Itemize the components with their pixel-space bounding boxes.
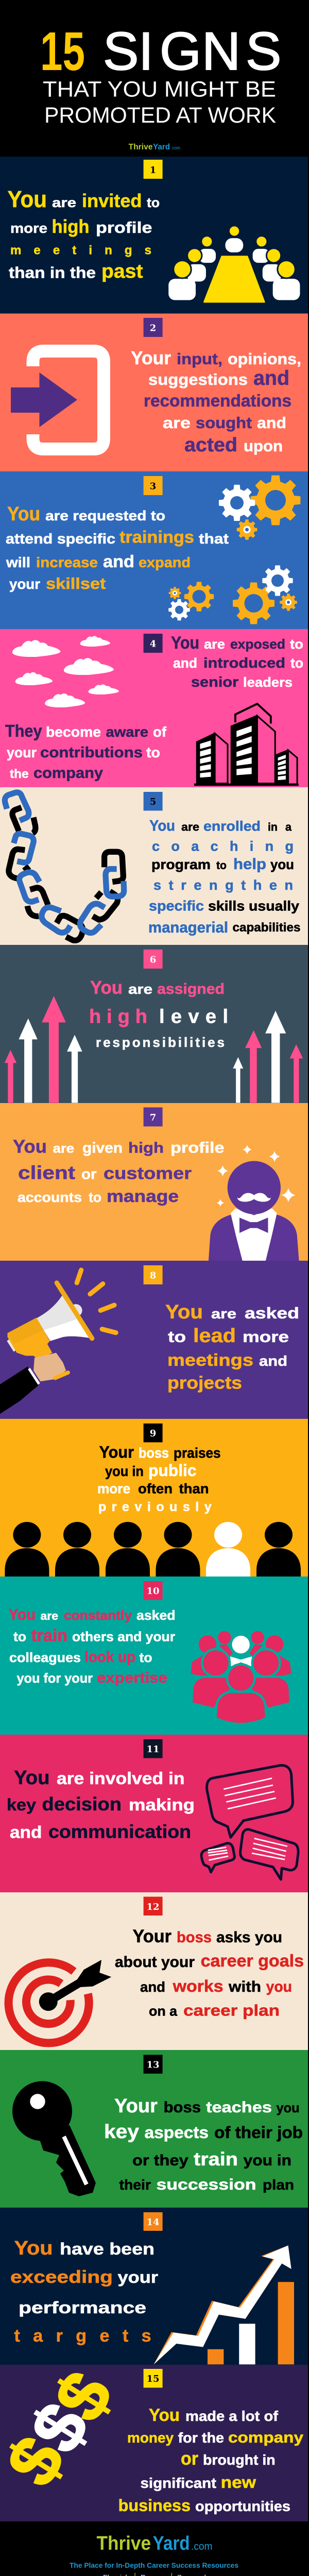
- text: sign 10: constantly: [64, 1607, 132, 1623]
- text: sign 2: sought: [196, 414, 252, 432]
- text: sign 9: often: [138, 1481, 173, 1497]
- logo: ThriveYard: .com: [171, 145, 180, 150]
- icon: man with moustache and bow tie: [209, 1145, 299, 1261]
- text: sign 13: train: [194, 2148, 238, 2170]
- text: sign 6: responsibilities: [96, 1035, 225, 1050]
- text: sign 3: skillset: [46, 574, 106, 592]
- text: sign 8: and: [259, 1353, 287, 1369]
- text: sign 3: are requested to: [45, 508, 165, 523]
- text: sign 5: to: [216, 859, 227, 872]
- badge 11: 11: [146, 1744, 160, 1755]
- panel: sign 8 lead meetings: [0, 1261, 309, 1419]
- text: sign 5: program: [151, 857, 211, 872]
- panel: sign 9 praise: [0, 1419, 309, 1577]
- text: sign 3: and: [103, 552, 134, 571]
- text: sign 14: your: [117, 2268, 158, 2286]
- badge 13: [144, 2055, 163, 2074]
- text: sign 13: plan: [263, 2177, 294, 2193]
- text: sign 15: new: [221, 2473, 256, 2492]
- icon: enter arrow: [11, 351, 104, 449]
- text: sign 4 upper: to: [290, 655, 303, 671]
- text: sign 1: [7, 186, 160, 282]
- text: sign 12: you: [266, 1978, 292, 1995]
- badge 5: [144, 792, 163, 811]
- text: sign 4 upper: introduced: [203, 655, 285, 671]
- badge 11: [144, 1739, 163, 1758]
- text: sign 3: increase: [36, 554, 98, 570]
- text: sign 13: boss: [164, 2099, 201, 2116]
- title: 15 Signs: SIGNS: [103, 22, 281, 81]
- text: sign 5: help: [233, 856, 266, 873]
- logo: ThriveYard footer: .com: [191, 2541, 212, 2552]
- text: sign 9: praises: [174, 1445, 221, 1461]
- text: sign 13: teaches: [206, 2099, 272, 2116]
- text: sign 4 upper: You: [171, 633, 199, 653]
- badge 1: 1: [150, 165, 156, 176]
- text: sign 4 lower: aware: [106, 724, 148, 740]
- text: sign 12: boss: [177, 1929, 212, 1946]
- text: sign 14: exceeding: [10, 2267, 113, 2287]
- text: sign 15: business: [118, 2496, 191, 2515]
- text: sign 4 upper: senior: [191, 674, 238, 690]
- badge 14: [144, 2212, 163, 2231]
- text: sign 10: train: [31, 1626, 67, 1645]
- logo: ThriveYard footer: Yard: [153, 2533, 190, 2554]
- text: sign 12: [115, 1926, 304, 2020]
- icon: arrows right: [233, 1011, 303, 1103]
- text: sign 10: colleagues: [9, 1650, 81, 1665]
- text: sign 1: than in the: [9, 264, 96, 282]
- text: sign 12: asks you: [216, 1929, 282, 1946]
- text: sign 4 upper: are: [204, 636, 225, 652]
- text: sign 3: that: [199, 531, 229, 547]
- text: sign 1: to: [147, 195, 160, 210]
- text: sign 4 lower: the: [10, 767, 29, 781]
- text: sign 10: asked: [136, 1607, 176, 1623]
- text: sign 11: [7, 1767, 195, 1842]
- text: sign 15: [118, 2405, 303, 2515]
- text: sign 10: you for your: [16, 1670, 93, 1686]
- text: sign 2: acted: [184, 434, 237, 456]
- text: sign 8: You: [165, 1301, 203, 1323]
- badge 12: 12: [146, 1902, 160, 1912]
- text: sign 1: meetings: [10, 244, 151, 258]
- icon: target with arrow: [9, 1960, 111, 2043]
- text: sign 8: to: [168, 1328, 186, 1346]
- text: sign 3: You: [7, 503, 40, 525]
- text: sign 5: [148, 817, 301, 936]
- icon: row of people: [5, 1522, 301, 1577]
- icon: speech bubbles: [201, 1766, 298, 1879]
- text: sign 2: are: [163, 414, 191, 432]
- text: sign 8: lead: [193, 1325, 236, 1347]
- text: sign 15: brought in: [203, 2452, 276, 2468]
- text: sign 5: You: [149, 817, 175, 835]
- text: sign 6: assigned: [157, 981, 225, 997]
- icon: arrows left: [5, 996, 82, 1103]
- text: sign 13: or they: [132, 2152, 188, 2169]
- icon: chain: [5, 792, 124, 940]
- text: sign 11: are involved in: [57, 1769, 185, 1788]
- badge 6: 6: [150, 954, 156, 965]
- text: sign 9: you in: [105, 1463, 144, 1479]
- text: sign 4 lower: [5, 721, 167, 782]
- text: sign 5: a: [285, 820, 292, 834]
- text: sign 14: performance: [19, 2298, 146, 2317]
- text: sign 10: to: [139, 1650, 152, 1665]
- text: sign 15: or: [181, 2448, 198, 2469]
- badge 10: 10: [146, 1586, 160, 1597]
- logo: ThriveYard footer: [97, 2533, 212, 2554]
- text: sign 13: key: [104, 2121, 139, 2143]
- text: sign 1: more: [10, 221, 47, 236]
- text: sign 12: career plan: [183, 2002, 280, 2020]
- text: sign 11: key: [7, 1795, 36, 1814]
- badge 3: [144, 476, 163, 495]
- text: sign 10: You: [8, 1605, 36, 1623]
- text: sign 4 upper: and: [173, 655, 197, 671]
- text: sign 13: of their job: [214, 2123, 303, 2142]
- text: sign 10: expertise: [97, 1670, 167, 1686]
- text: sign 14: have been: [60, 2240, 154, 2258]
- text: sign 7: high: [128, 1140, 164, 1156]
- text: sign 8: more: [243, 1328, 289, 1346]
- text: sign 9: more: [97, 1481, 130, 1497]
- footer words: [103, 2573, 206, 2576]
- badge 14: 14: [146, 2217, 160, 2228]
- text: sign 6: are: [128, 981, 152, 997]
- text: sign 5: strengthen: [153, 877, 293, 893]
- subtitle: PROMOTED AT WORK: [44, 103, 276, 128]
- text: sign 5: in: [268, 820, 278, 834]
- text: sign 4 lower: company: [33, 765, 103, 782]
- text: sign 9: boss: [139, 1445, 169, 1461]
- panel: sign 4 senior leaders: [0, 629, 309, 787]
- text: sign 5: capabilities: [233, 921, 301, 935]
- text: sign 11: making: [129, 1795, 195, 1814]
- text: sign 12: with: [228, 1978, 261, 1995]
- icon: office buildings: [194, 704, 299, 786]
- text: sign 4 lower: They: [5, 721, 42, 740]
- text: sign 4 lower: contributions: [40, 744, 143, 761]
- text: sign 2: input,: [177, 350, 222, 368]
- text: sign 13: aspects: [144, 2123, 209, 2142]
- panel: sign 14 targets: [0, 2208, 309, 2365]
- panel: sign 6 responsibilities: [0, 945, 309, 1103]
- text: sign 8: are: [211, 1306, 236, 1321]
- text: sign 2: upon: [244, 437, 283, 455]
- text: sign 15: company: [228, 2429, 303, 2446]
- icon: meeting table with people: [168, 226, 300, 302]
- text: sign 7: customer: [104, 1164, 192, 1183]
- badge 4: [144, 634, 163, 653]
- icon: dollar signs: $: [38, 2358, 128, 2434]
- text: sign 15: opportunities: [195, 2498, 290, 2514]
- badge 2: [144, 318, 163, 337]
- text: sign 12: on a: [149, 2004, 178, 2019]
- text: sign 15: for the: [178, 2430, 224, 2446]
- badge 10: [144, 1581, 163, 1600]
- badge 9: [144, 1423, 163, 1443]
- text: sign 3: expand: [139, 554, 191, 570]
- badge 15: [144, 2369, 163, 2387]
- panel: sign 15 money: [0, 2358, 309, 2521]
- text: sign 2: opinions,: [228, 350, 301, 368]
- text: sign 11: You: [14, 1767, 49, 1789]
- panel: sign 5 coaching: [0, 787, 309, 945]
- text: sign 5: skills usually: [208, 899, 299, 914]
- text: sign 13: their: [119, 2177, 151, 2193]
- icon: dollar signs: $: [14, 2389, 105, 2466]
- text: sign 14: You: [14, 2238, 53, 2259]
- text: sign 5: managerial: [148, 919, 228, 936]
- subtitle: THAT YOU MIGHT BE: [43, 77, 276, 102]
- panel: sign 7 client accounts: [0, 1103, 309, 1261]
- panel: header: [0, 0, 309, 157]
- text: sign 1: You: [7, 186, 47, 212]
- text: sign 1: profile: [96, 218, 152, 236]
- badge 4: 4: [150, 639, 156, 649]
- text: sign 5: coaching: [152, 839, 294, 854]
- icon: clouds: [12, 636, 119, 707]
- badge 8: 8: [150, 1270, 156, 1281]
- text: sign 5: are: [181, 820, 199, 834]
- text: sign 15: You: [149, 2405, 180, 2425]
- badge 12: [144, 1897, 163, 1916]
- text: sign 8: projects: [167, 1373, 242, 1393]
- panel: sign 2 input: [0, 313, 309, 472]
- text: sign 11: decision: [42, 1793, 122, 1815]
- text: sign 7: You: [13, 1136, 47, 1157]
- badge 13: 13: [146, 2060, 160, 2070]
- text: sign 7: accounts: [18, 1190, 82, 1205]
- text: sign 9: Your: [99, 1443, 134, 1461]
- text: sign 8: meetings: [167, 1350, 253, 1369]
- text: sign 12: and: [140, 1979, 165, 1995]
- panel: sign 13 succession: [0, 2050, 309, 2208]
- text: sign 2: [131, 347, 301, 456]
- text: sign 6: [89, 977, 228, 1050]
- text: sign 7: are: [53, 1141, 74, 1156]
- badge 5: 5: [150, 796, 156, 807]
- subtitle: [43, 77, 276, 128]
- icon: key: [12, 2081, 96, 2196]
- text: sign 2: and: [257, 414, 286, 432]
- badge 15: 15: [146, 2374, 160, 2384]
- panel: sign 3 trainings: [0, 471, 309, 629]
- logo: ThriveYard: Thrive: [129, 143, 153, 151]
- text: sign 5: enrolled: [203, 818, 261, 834]
- text: sign 13: Your: [114, 2095, 158, 2117]
- text: sign 4 lower: of: [153, 724, 167, 740]
- badge 7: 7: [150, 1112, 156, 1123]
- logo: ThriveYard: Yard: [153, 143, 170, 151]
- text: sign 3: will: [6, 554, 30, 570]
- text: sign 7: given: [82, 1140, 123, 1156]
- text: sign 6: high: [89, 1006, 147, 1028]
- text: sign 8: [165, 1301, 299, 1393]
- text: sign 4 lower: to: [146, 744, 160, 760]
- text: sign 9: [97, 1443, 221, 1514]
- text: sign 6: level: [159, 1006, 228, 1028]
- text: sign 7: profile: [170, 1139, 225, 1156]
- chart: rising bars and arrow: [154, 2245, 294, 2364]
- text: sign 15: money: [127, 2430, 174, 2446]
- text: sign 3: [6, 503, 229, 592]
- tagline: The Place for In-Depth Career Success Resources: [70, 2562, 238, 2569]
- text: sign 9: than: [179, 1481, 209, 1497]
- badge 7: [144, 1107, 163, 1126]
- text: sign 13: succession: [157, 2176, 256, 2193]
- text: sign 10: look up: [84, 1649, 135, 1666]
- badge 1: [144, 160, 163, 179]
- text: sign 13: [104, 2095, 303, 2193]
- title: 15 Signs: 15: [40, 21, 85, 82]
- panel: sign 10 expertise: [0, 1577, 309, 1735]
- text: sign 1: past: [101, 261, 143, 282]
- icon: dollar signs: [0, 2358, 128, 2499]
- text: sign 12: career goals: [201, 1951, 304, 1970]
- text: sign 6: You: [90, 977, 123, 998]
- text: sign 14: targets: [14, 2326, 151, 2346]
- text: sign 13: you: [276, 2100, 300, 2115]
- text: sign 2: and: [253, 367, 289, 389]
- text: sign 12: Your: [133, 1926, 171, 1946]
- badge 8: [144, 1265, 163, 1284]
- text: sign 7: manage: [107, 1187, 179, 1206]
- badge 2: 2: [150, 323, 156, 334]
- text: sign 15: made a lot of: [185, 2408, 279, 2424]
- text: sign 10: to: [13, 1629, 26, 1645]
- text: sign 3: your: [9, 576, 40, 592]
- logo: ThriveYard: [129, 143, 180, 151]
- panel: sign 1 meetings: [0, 157, 309, 314]
- text: sign 7: [13, 1136, 225, 1206]
- panel: footer: [0, 2521, 309, 2576]
- text: sign 11: communication: [48, 1821, 191, 1842]
- text: sign 7: or: [81, 1166, 97, 1183]
- text: sign 12: works: [173, 1977, 224, 1995]
- text: sign 1: invited: [82, 190, 142, 211]
- icon: group of people: [191, 1631, 291, 1724]
- text: sign 10: others and your: [72, 1629, 175, 1645]
- panel: sign 12 career plan: [0, 1892, 309, 2050]
- logo: ThriveYard footer: Thrive: [97, 2533, 151, 2554]
- text: sign 9: public: [148, 1461, 197, 1480]
- text: sign 9: previously: [98, 1500, 212, 1514]
- text: sign 4 upper: leaders: [243, 674, 293, 690]
- text: sign 5: specific: [149, 897, 204, 914]
- text: sign 11: and: [10, 1823, 42, 1841]
- text: sign 13: you in: [244, 2152, 291, 2169]
- text: sign 10: are: [40, 1609, 58, 1622]
- text: sign 4 upper: exposed: [230, 636, 285, 652]
- text: sign 1: high: [52, 216, 90, 237]
- text: sign 4 lower: become: [46, 724, 101, 740]
- text: sign 7: client: [18, 1162, 75, 1183]
- text: sign 2: Your: [131, 347, 171, 368]
- badge 6: [144, 950, 163, 969]
- text: sign 14: [10, 2238, 158, 2346]
- text: sign 10: [8, 1605, 176, 1686]
- text: sign 5: you: [270, 857, 294, 872]
- text: sign 2: recommendations: [144, 391, 291, 410]
- text: sign 3: attend specific: [6, 531, 115, 547]
- text: sign 2: suggestions: [148, 370, 248, 388]
- text: sign 4 upper: [171, 633, 303, 690]
- text: sign 8: asked: [245, 1304, 299, 1322]
- text: sign 1: are: [52, 195, 76, 210]
- icon: gears upper: [219, 476, 300, 540]
- panel: sign 11 decision making: [0, 1735, 309, 1892]
- text: sign 12: about your: [115, 1954, 195, 1971]
- icon: megaphone: [0, 1270, 116, 1414]
- icon: gears lower: [168, 565, 297, 624]
- text: sign 4 lower: your: [7, 744, 37, 760]
- badge 3: 3: [150, 481, 156, 492]
- text: sign 4 upper: to: [290, 636, 303, 652]
- text: sign 7: to: [89, 1190, 101, 1205]
- badge 9: 9: [150, 1428, 156, 1439]
- text: sign 15: significant: [140, 2475, 216, 2491]
- text: sign 3: trainings: [119, 528, 194, 546]
